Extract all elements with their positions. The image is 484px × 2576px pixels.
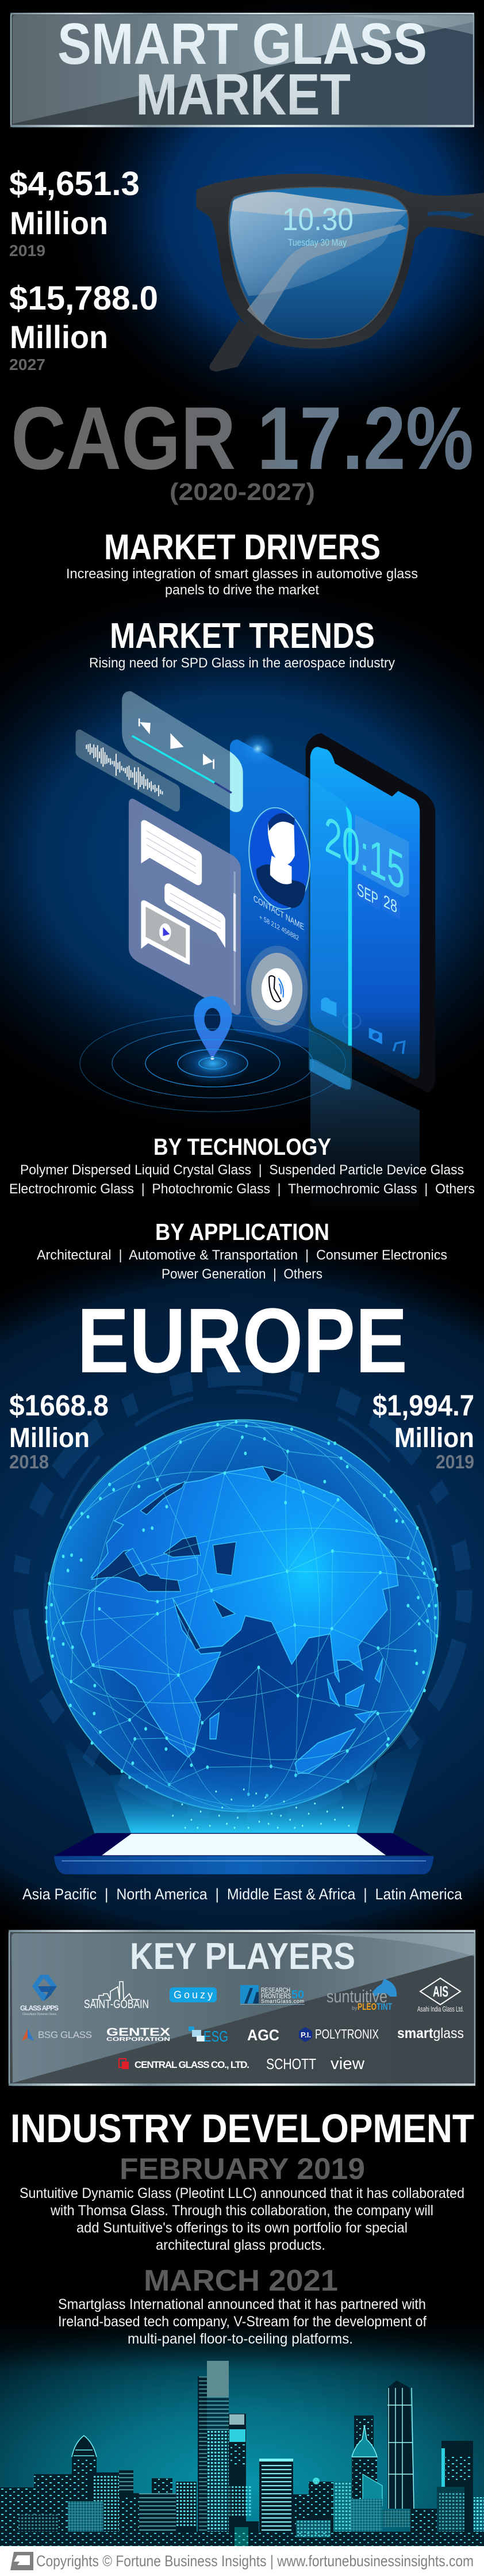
chat panel	[129, 799, 241, 1015]
Europe value 2019	[372, 1389, 474, 1472]
illustration: isometric smartphone with floating panels	[76, 691, 435, 1214]
market drivers: MARKET DRIVERS	[104, 528, 381, 567]
lens time display: 10.30	[282, 201, 354, 237]
CAGR headline: (2020-2027)	[170, 478, 315, 505]
logo: Glass Apps	[20, 1975, 59, 2016]
contact avatar	[244, 805, 315, 912]
phone body	[306, 733, 435, 1093]
date on phone: 28	[383, 891, 397, 917]
logo: smartglass: smartglass	[397, 2025, 464, 2041]
contact number: + 58 212 456882	[259, 913, 299, 942]
logo: Asahi India Glass	[417, 1978, 464, 2013]
logo: AGC: AGC	[247, 2027, 279, 2044]
market value 2019: Million	[10, 205, 108, 241]
location pin	[176, 996, 250, 1086]
logo: Asahi India Glass: AIS	[433, 1983, 448, 2000]
hologram beams	[60, 1731, 428, 1855]
by application: BY APPLICATION	[155, 1219, 329, 1245]
lens date display: Tuesday 30 May	[288, 237, 347, 248]
floating panels	[76, 691, 243, 1015]
logo: View: view	[331, 2055, 365, 2073]
logo: ESG: ESG	[203, 2028, 228, 2045]
logo: Research Frontiers: SmartGlass.com	[261, 1998, 304, 2004]
logo: Polytronix: POLYTRONIX	[315, 2027, 379, 2041]
logo: Central Glass: CENTRAL GLASS CO., LTD.	[135, 2059, 249, 2070]
market value 2027: $15,788.0	[9, 280, 158, 317]
city buildings	[0, 2360, 484, 2546]
by technology	[9, 1134, 475, 1197]
footer bar	[0, 2546, 484, 2576]
globe sphere	[47, 1420, 439, 1812]
development: March 2021: multi-panel floor-to-ceiling platforms.	[128, 2331, 353, 2347]
chat video bubble	[141, 900, 190, 965]
logo: Polytronix	[299, 2027, 379, 2042]
development: February 2019: architectural glass products.	[156, 2237, 325, 2253]
market drivers: Increasing integration of smart glasses in automotive glass	[66, 566, 418, 582]
Europe value 2019: 2019	[436, 1451, 474, 1472]
by technology: Electrochromic Glass | Photochromic Glass | Thermochromic Glass | Others	[9, 1181, 475, 1197]
projector device	[54, 1833, 433, 1874]
by application: Power Generation | Others	[162, 1266, 322, 1282]
logo: Research Frontiers: 50	[291, 1989, 304, 2001]
logo: Suntuitive by Pleotint	[326, 1979, 397, 2012]
market value 2019	[9, 165, 140, 259]
other regions: Asia Pacific | North America | Middle East & Africa | Latin America	[22, 1886, 463, 1903]
development: March 2021: Ireland-based tech company, V-Stream for the development of	[58, 2314, 427, 2330]
contact name: CONTACT NAME	[253, 894, 304, 933]
market value 2019: $4,651.3	[9, 165, 140, 203]
chat bubble two	[164, 883, 225, 948]
icon: Fortune Business Insights logo	[10, 2552, 33, 2570]
date on phone: SEP	[357, 879, 378, 910]
region: Europe heading: EUROPE	[77, 1289, 408, 1392]
market trends: Rising need for SPD Glass in the aerospace industry	[89, 655, 395, 671]
development: February 2019: with Thomsa Glass. Through this collaboration, the company will	[50, 2203, 433, 2219]
market value 2027: Million	[10, 319, 108, 355]
by technology: Polymer Dispersed Liquid Crystal Glass | Suspended Particle Device Glass	[20, 1162, 464, 1178]
clock on phone: 20:15	[324, 805, 405, 902]
network nodes	[47, 1422, 437, 1795]
title panel	[10, 12, 474, 127]
development: March 2021	[58, 2264, 427, 2347]
development: March 2021: Smartglass International announced that it has partnered with	[58, 2296, 426, 2312]
by application	[37, 1219, 447, 1282]
key players panel	[9, 1930, 475, 2086]
logo: Gouzy: Gouzy	[174, 1989, 213, 2001]
development: February 2019	[20, 2153, 464, 2253]
Europe value 2018: $1668.8	[9, 1389, 109, 1422]
title text	[57, 12, 427, 127]
logo: Gentex: CORPORATION	[106, 2036, 170, 2042]
logo: Suntuitive by Pleotint: suntuitive	[326, 1986, 387, 2006]
logo: Polytronix: P.I.	[301, 2031, 311, 2039]
title text: SMART GLASS	[57, 12, 427, 77]
logo: Glass Apps: GlassApps Dynamic Glass	[22, 2013, 56, 2016]
illustration: hologram globe	[20, 1375, 464, 1874]
Europe value 2019: Million	[394, 1423, 474, 1453]
logo: Suntuitive by Pleotint: PLEOTINT	[358, 2001, 392, 2012]
development: March 2021: MARCH 2021	[144, 2264, 338, 2298]
phone reflection	[310, 1059, 420, 1214]
logo: Research Frontiers: RESEARCH	[261, 1987, 290, 1994]
logo: BSG Glass: BSG GLASS	[38, 2029, 92, 2040]
market trends	[89, 616, 395, 671]
inland seas	[91, 1466, 286, 1650]
peninsulas	[125, 1548, 198, 1581]
waveform panel	[76, 730, 180, 811]
logo: Research Frontiers: FRONTIERS	[261, 1993, 291, 2000]
title text: MARKET	[136, 63, 351, 127]
network lines	[35, 1400, 450, 1831]
contact panel	[230, 734, 352, 1090]
by technology: BY TECHNOLOGY	[153, 1134, 331, 1160]
skyline photo	[0, 2318, 484, 2546]
logo: Glass Apps: GLASS APPS	[20, 2004, 59, 2012]
logo: Suntuitive by Pleotint: by	[352, 2005, 358, 2011]
Europe value 2018: 2018	[9, 1451, 49, 1472]
logo: Schott: SCHOTT	[266, 2055, 316, 2073]
central hologram beam	[110, 1755, 378, 1834]
media player panel	[122, 691, 243, 812]
illustration: smart glasses	[197, 174, 484, 372]
market drivers: panels to drive the market	[165, 582, 319, 598]
market trends: MARKET TRENDS	[110, 616, 375, 656]
radar rings	[80, 1015, 345, 1112]
call button	[246, 946, 308, 1033]
logo: ESG	[189, 2027, 228, 2045]
logo: BSG Glass	[22, 2028, 92, 2041]
logo: Saint-Gobain	[84, 1982, 149, 2011]
logo: Research Frontiers	[240, 1985, 305, 2005]
Europe value 2019: $1,994.7	[372, 1389, 474, 1422]
logo: Gentex	[106, 2027, 170, 2042]
development: February 2019: add Suntuitive's offerings to its own portfolio for special	[76, 2220, 408, 2236]
market value 2027	[9, 280, 158, 373]
key players heading: KEY PLAYERS	[130, 1935, 355, 1977]
Europe value 2018: Million	[9, 1423, 90, 1453]
market value 2027: 2027	[9, 356, 45, 373]
market value 2019: 2019	[9, 242, 45, 259]
logo: Gouzy	[170, 1987, 217, 2002]
by application: Architectural | Automotive & Transportation | Consumer Electronics	[37, 1247, 447, 1263]
continents	[81, 1466, 398, 1773]
chat bubble one	[141, 820, 202, 885]
Europe value 2018	[9, 1389, 109, 1472]
logo: Gentex: GENTEX	[106, 2027, 170, 2039]
market drivers	[66, 528, 418, 598]
hologram particles	[173, 1789, 349, 1828]
development: February 2019: FEBRUARY 2019	[120, 2153, 365, 2186]
HUD arcs	[20, 1375, 464, 1812]
logo: Saint-Gobain: SAINT-GOBAIN	[84, 1998, 149, 2011]
